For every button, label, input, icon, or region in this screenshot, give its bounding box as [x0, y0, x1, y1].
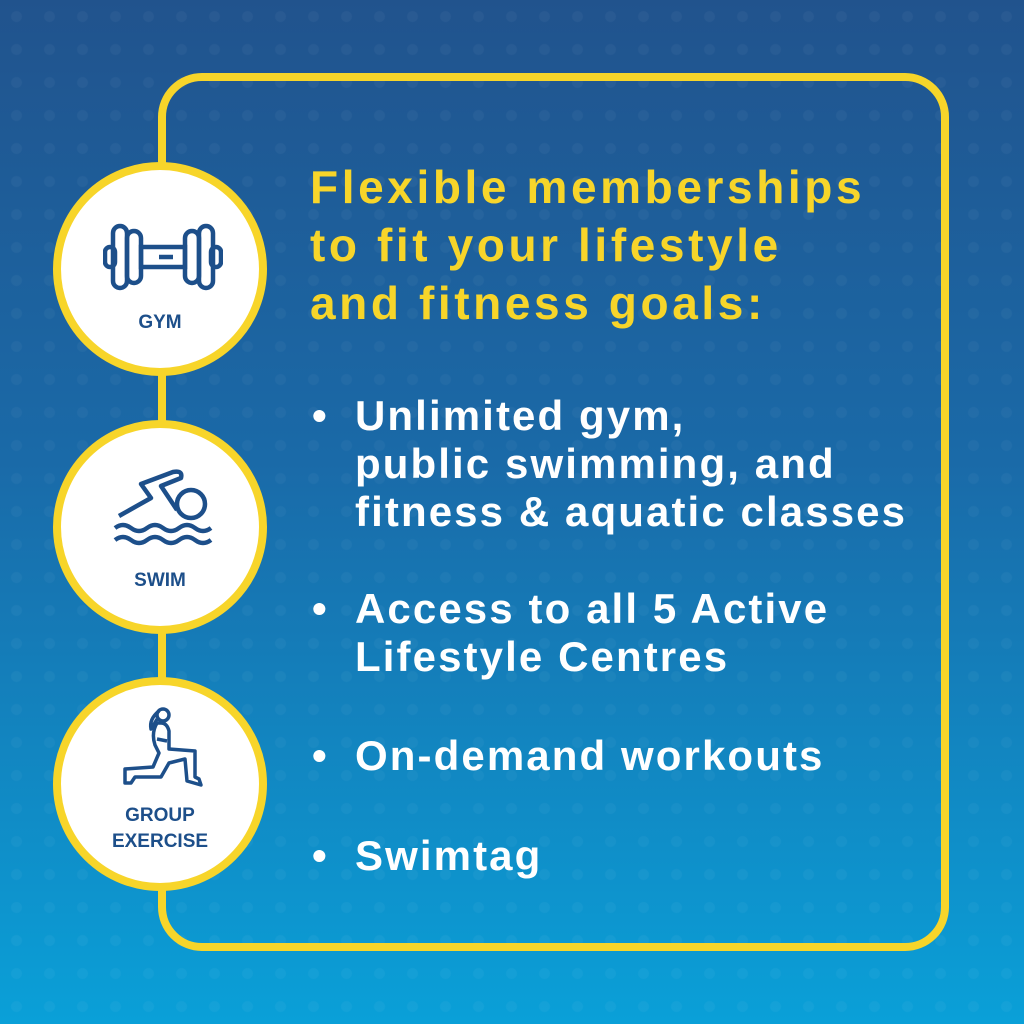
- icon: lunging woman: [123, 707, 203, 787]
- headline: and fitness goals:: [310, 277, 766, 329]
- bullet: access: [312, 585, 829, 680]
- bullet: unlimited: public swimming, and: [355, 440, 836, 487]
- yellow frame: [158, 73, 949, 951]
- bullet: unlimited: [312, 392, 907, 535]
- bullet: unlimited: •: [312, 392, 329, 439]
- circle: group exercise: EXERCISE: [112, 831, 208, 852]
- bullet: swimtag: Swimtag: [355, 832, 542, 879]
- bullet: unlimited: fitness & aquatic classes: [355, 488, 907, 535]
- bullet: swimtag: •: [312, 832, 329, 879]
- icon: dumbbell: [103, 224, 223, 290]
- circle: swim: SWIM: [134, 570, 186, 591]
- bullet: on-demand: •: [312, 732, 329, 779]
- circle: group exercise: GROUP: [125, 805, 195, 826]
- circle: group exercise: [53, 677, 267, 891]
- bullet: on-demand: On-demand workouts: [355, 732, 824, 779]
- circle: gym: [53, 162, 267, 376]
- bullet: access: Access to all 5 Active: [355, 585, 829, 632]
- headline: Flexible memberships: [310, 161, 865, 213]
- bullet: access: •: [312, 585, 329, 632]
- bullet: unlimited: Unlimited gym,: [355, 392, 685, 439]
- bullet: access: Lifestyle Centres: [355, 633, 729, 680]
- headline: to fit your lifestyle: [310, 219, 782, 271]
- circle: gym: GYM: [138, 312, 182, 333]
- headline: [310, 161, 865, 329]
- circle: swim: [53, 420, 267, 634]
- icon: swimmer: [114, 469, 212, 546]
